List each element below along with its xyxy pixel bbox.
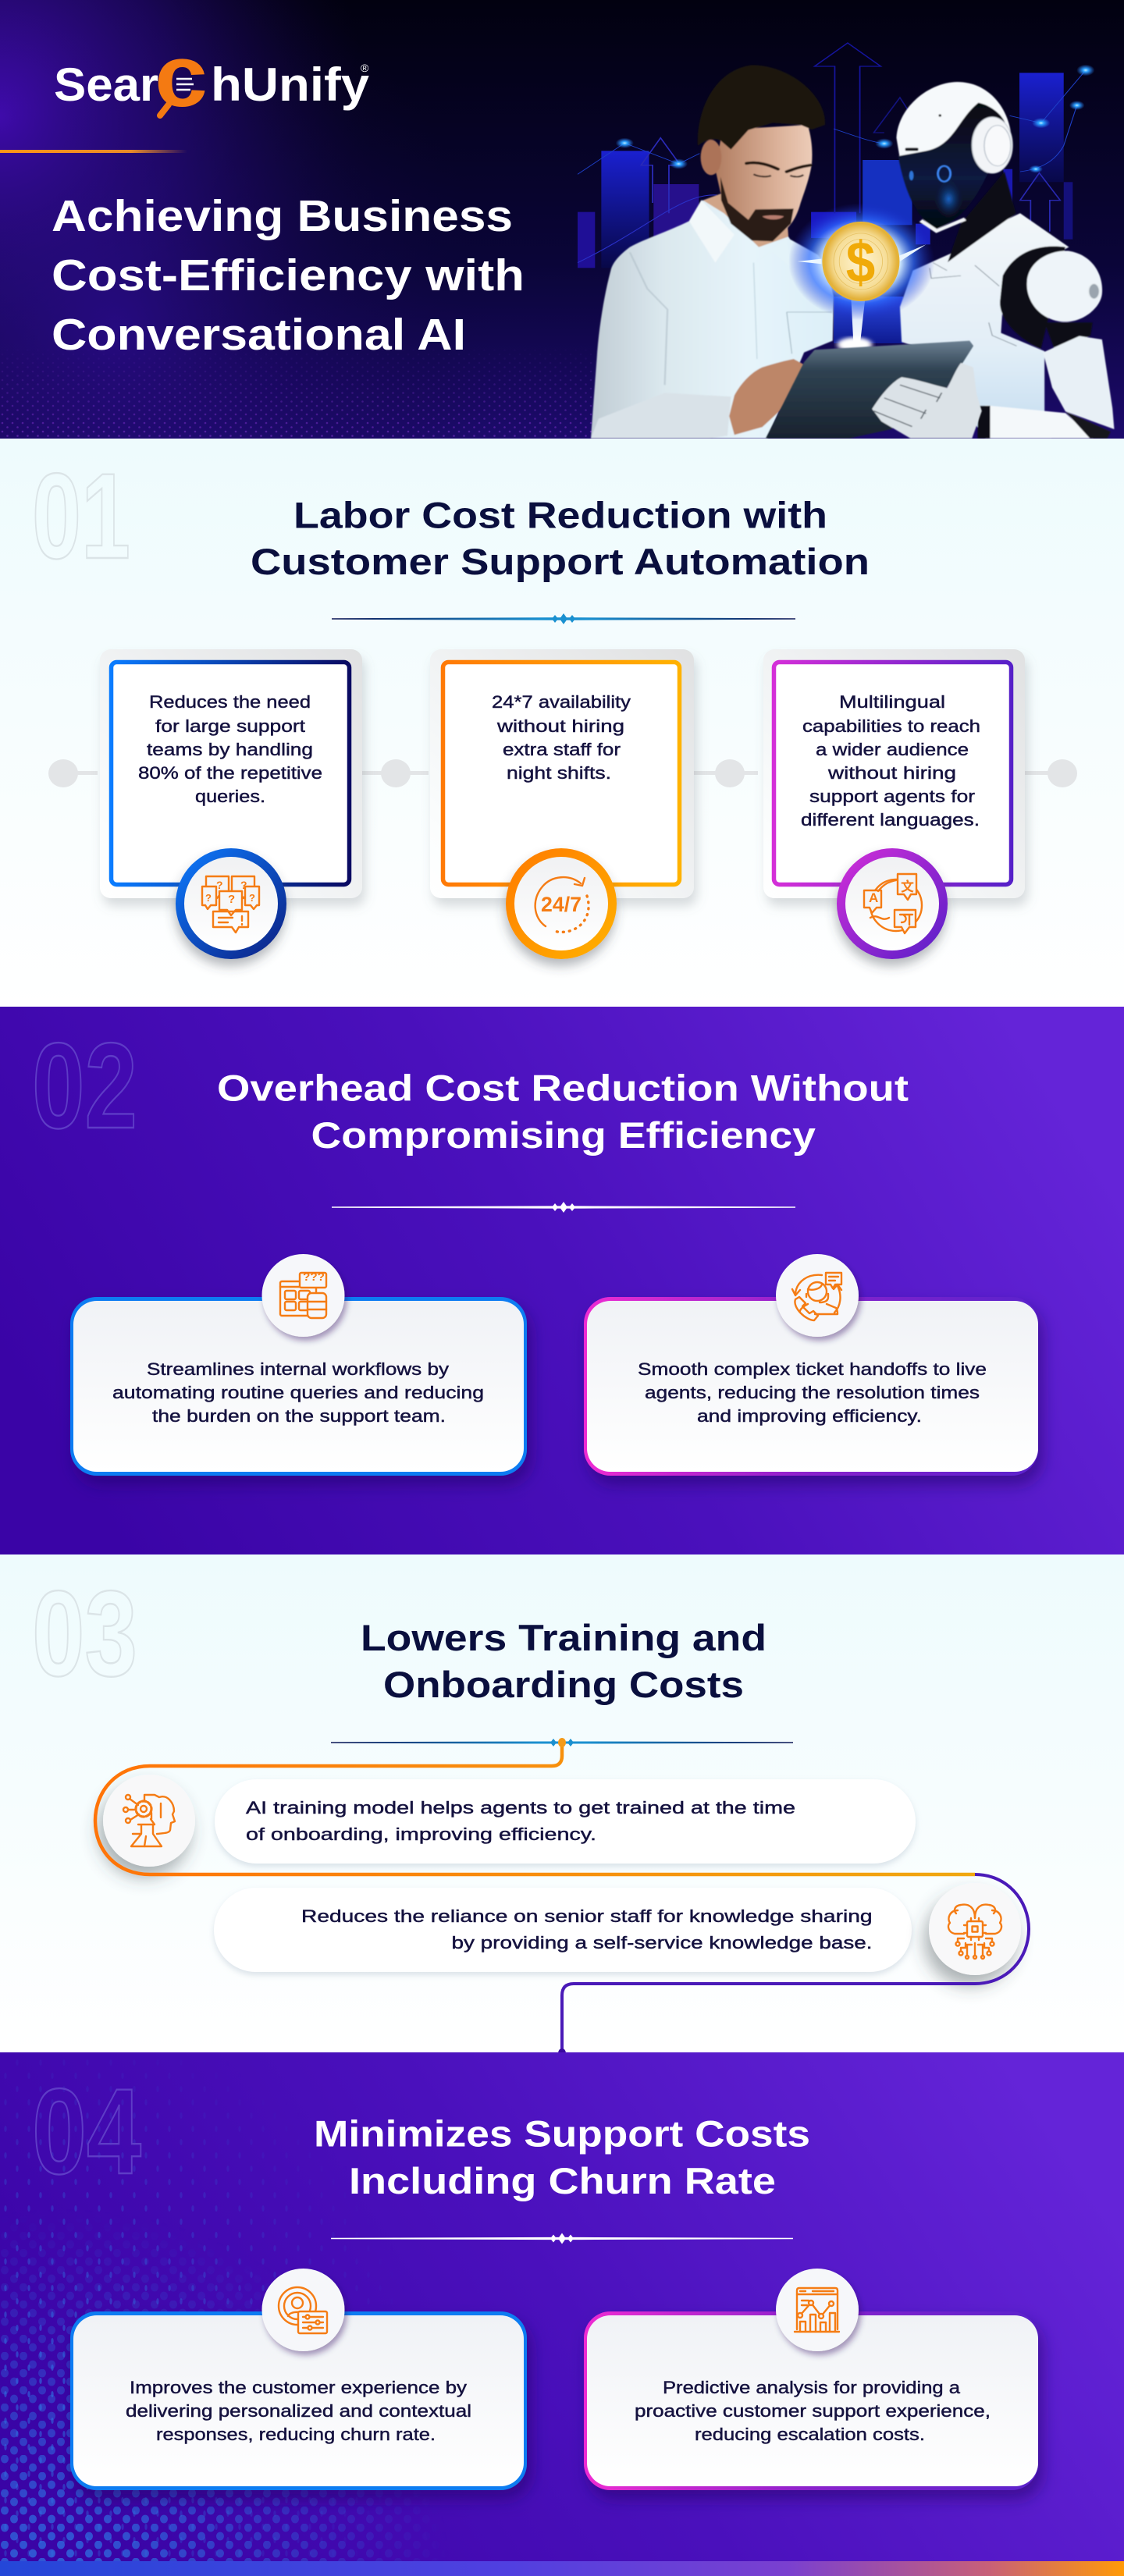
card 1 text: teams by handling	[147, 740, 313, 759]
title: Cost-Efficiency with	[52, 250, 525, 300]
figure: man	[591, 65, 834, 439]
icon: languages globe: A	[869, 890, 878, 905]
panel: hero header	[0, 0, 1124, 439]
card 3 text: support agents for	[809, 787, 976, 806]
heading: Compromising Efficiency	[311, 1114, 816, 1156]
heading: Minimizes Support Costs	[314, 2113, 810, 2154]
icon: 24/7: 24/7	[541, 893, 582, 916]
card 3 text	[801, 692, 980, 830]
pill: training model	[215, 1779, 916, 1864]
card text: agents, reducing the resolution times	[645, 1383, 980, 1402]
figure: robot	[896, 82, 1114, 439]
title: Achieving Business	[52, 191, 513, 241]
icon: question bubbles: ?	[205, 892, 212, 904]
card 3 text: a wider audience	[816, 740, 969, 759]
card 1 text: Reduces the need	[149, 692, 311, 712]
card text: automating routine queries and reducing	[112, 1383, 484, 1402]
heading: Onboarding Costs	[383, 1664, 744, 1705]
card text: Smooth complex ticket handoffs to live	[638, 1359, 987, 1379]
card text	[112, 1359, 484, 1426]
heading	[314, 2113, 810, 2201]
card text: proactive customer support experience,	[635, 2401, 991, 2421]
card text	[638, 1359, 987, 1426]
coin with glow	[788, 203, 935, 352]
card text: Improves the customer experience by	[130, 2378, 468, 2397]
logo: SearchUnify	[54, 27, 370, 125]
logo: SearchUnify: hUnify	[211, 59, 370, 111]
chart bars and arrows backdrop	[578, 43, 1094, 343]
pill: training model: of onboarding, improving efficiency.	[246, 1825, 596, 1844]
heading: Customer Support Automation	[251, 541, 870, 582]
section number 02: 02	[32, 1018, 137, 1154]
pill: training model: AI training model helps agents to get trained at the time	[246, 1798, 795, 1817]
card text: delivering personalized and contextual	[126, 2401, 471, 2421]
card 1 text: 80% of the repetitive	[138, 763, 322, 783]
connectors	[48, 759, 1077, 787]
divider	[331, 2233, 793, 2244]
heading	[251, 495, 870, 582]
icon: personalization sliders	[262, 2269, 345, 2351]
logo: SearchUnify: ®	[361, 62, 369, 74]
card 3 text: Multilingual	[839, 692, 945, 712]
section number 01: 01	[32, 449, 130, 584]
card text: the burden on the support team.	[152, 1406, 446, 1426]
card text	[126, 2378, 471, 2444]
logo: SearchUnify: c	[155, 27, 208, 125]
card: ticket handoffs	[584, 1254, 1038, 1476]
card 2	[430, 649, 694, 959]
pill: self-service knowledge	[214, 1888, 912, 1972]
card: workflows	[70, 1254, 527, 1476]
icon: question bubbles	[176, 848, 286, 959]
card 3 text: different languages.	[801, 810, 980, 830]
panel: section 3 training costs	[0, 1554, 1124, 2058]
card text: reducing escalation costs.	[695, 2425, 925, 2444]
card 2 text	[492, 692, 631, 783]
icon: AI head	[103, 1775, 195, 1867]
card: customer experience	[70, 2269, 527, 2490]
heading: Lowers Training and	[361, 1617, 767, 1658]
card text: Streamlines internal workflows by	[147, 1359, 450, 1379]
heading: Including Churn Rate	[349, 2160, 776, 2201]
divider	[332, 1202, 795, 1213]
card text: responses, reducing churn rate.	[156, 2425, 436, 2444]
connector end dots	[558, 1738, 566, 2058]
pill: self-service knowledge: by providing a self-service knowledge base.	[451, 1933, 873, 1952]
title: Conversational AI	[52, 310, 466, 360]
section number 04: 04	[32, 2064, 141, 2200]
icon: question bubbles: ?	[240, 879, 247, 891]
pill: self-service knowledge: Reduces the reliance on senior staff for knowledge sharing	[301, 1906, 873, 1926]
card 1	[100, 649, 362, 959]
icon: workflow database: ???	[303, 1270, 325, 1284]
card text: Predictive analysis for providing a	[663, 2378, 961, 2397]
heading	[217, 1068, 909, 1156]
card 3 text: without hiring	[827, 763, 956, 783]
card: predictive analysis	[584, 2269, 1038, 2490]
footer gradient bar	[0, 2561, 1124, 2576]
connector path: purple	[562, 1874, 1029, 2054]
icon: question bubbles: ?	[228, 893, 235, 906]
heading: Overhead Cost Reduction Without	[217, 1068, 909, 1108]
card 2 text: night shifts.	[507, 763, 611, 783]
panel: section 2 overhead cost	[0, 1007, 1124, 1554]
heading	[361, 1617, 767, 1705]
icon: question bubbles: ?	[216, 879, 223, 891]
icon: support agent	[776, 1254, 859, 1337]
card 1 text: for large support	[155, 716, 306, 736]
section number 03: 03	[32, 1566, 137, 1702]
icon: languages globe	[837, 848, 948, 959]
card 1 text	[138, 692, 322, 806]
card 2 text: extra staff for	[503, 740, 621, 759]
logo: SearchUnify: Sear	[54, 59, 158, 111]
icon: question bubbles: ?	[249, 892, 255, 904]
illustration: man and robot with coin	[578, 43, 1114, 439]
icon: AI brain	[929, 1883, 1021, 1975]
tablet and robot hand	[766, 341, 982, 439]
panel: section 1 labor cost	[0, 439, 1124, 1007]
card 2 text: 24*7 availability	[492, 692, 631, 712]
accent line	[0, 150, 187, 153]
card 3 text: capabilities to reach	[802, 716, 980, 736]
title	[52, 191, 525, 360]
icon: analytics window	[776, 2269, 859, 2351]
panel: section 4 support costs	[0, 2052, 1124, 2561]
card 3	[763, 649, 1025, 959]
heading: Labor Cost Reduction with	[293, 495, 827, 535]
card text	[635, 2378, 991, 2444]
icon: workflow database	[262, 1254, 345, 1337]
card text: and improving efficiency.	[697, 1406, 922, 1426]
divider	[332, 613, 795, 624]
icon: languages globe: 文	[901, 879, 914, 894]
coin with glow: $	[846, 230, 875, 295]
icon: 24/7	[506, 848, 617, 959]
card 1 text: queries.	[195, 787, 265, 806]
divider	[331, 1739, 793, 1746]
connector path: orange	[95, 1743, 975, 1874]
card 2 text: without hiring	[496, 716, 624, 736]
